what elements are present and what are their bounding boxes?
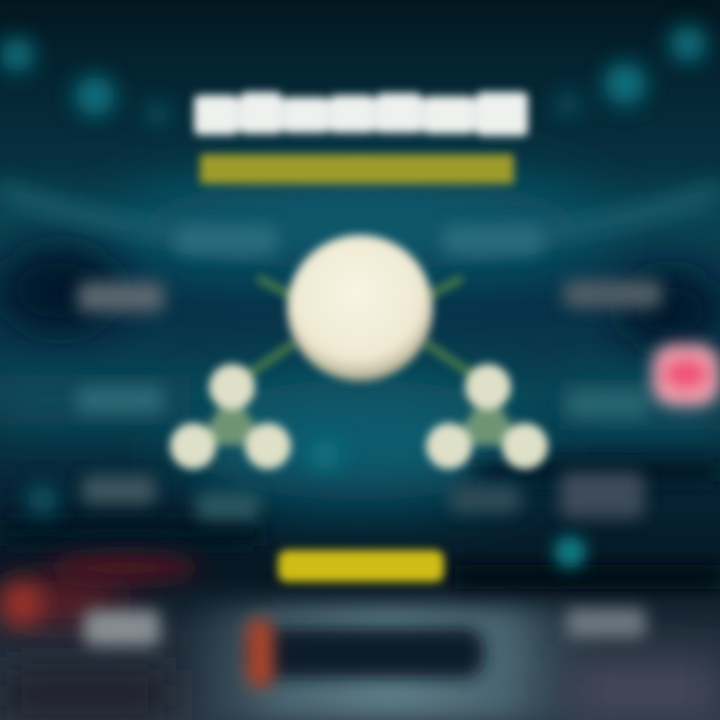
- label: left 3: [82, 476, 156, 504]
- left node cluster: [170, 364, 291, 469]
- subtitle banner: [200, 154, 514, 184]
- orange bar cap: [246, 618, 274, 688]
- label: left 2: [76, 386, 164, 414]
- label: lower right node: [450, 486, 520, 512]
- title: [194, 92, 528, 136]
- label: upper left: [176, 226, 278, 254]
- label: right 3: [560, 472, 644, 518]
- label: left 1: [78, 282, 164, 312]
- decorative teal dots: [0, 26, 706, 515]
- dark bottom bar: [246, 618, 484, 688]
- label: lower left node: [196, 492, 260, 520]
- bottom floor glow: [0, 554, 720, 720]
- label: bottom right: [566, 608, 646, 638]
- label: right 1: [564, 280, 662, 308]
- label: upper right: [442, 226, 542, 254]
- pink badge: [652, 344, 720, 406]
- central sphere: [287, 235, 433, 381]
- label: bottom left: [84, 610, 160, 646]
- yellow button: [278, 550, 444, 582]
- label: right 2: [566, 390, 648, 418]
- right node cluster: [426, 364, 548, 469]
- teal accent dot: [554, 536, 586, 568]
- connector lines: [195, 278, 525, 445]
